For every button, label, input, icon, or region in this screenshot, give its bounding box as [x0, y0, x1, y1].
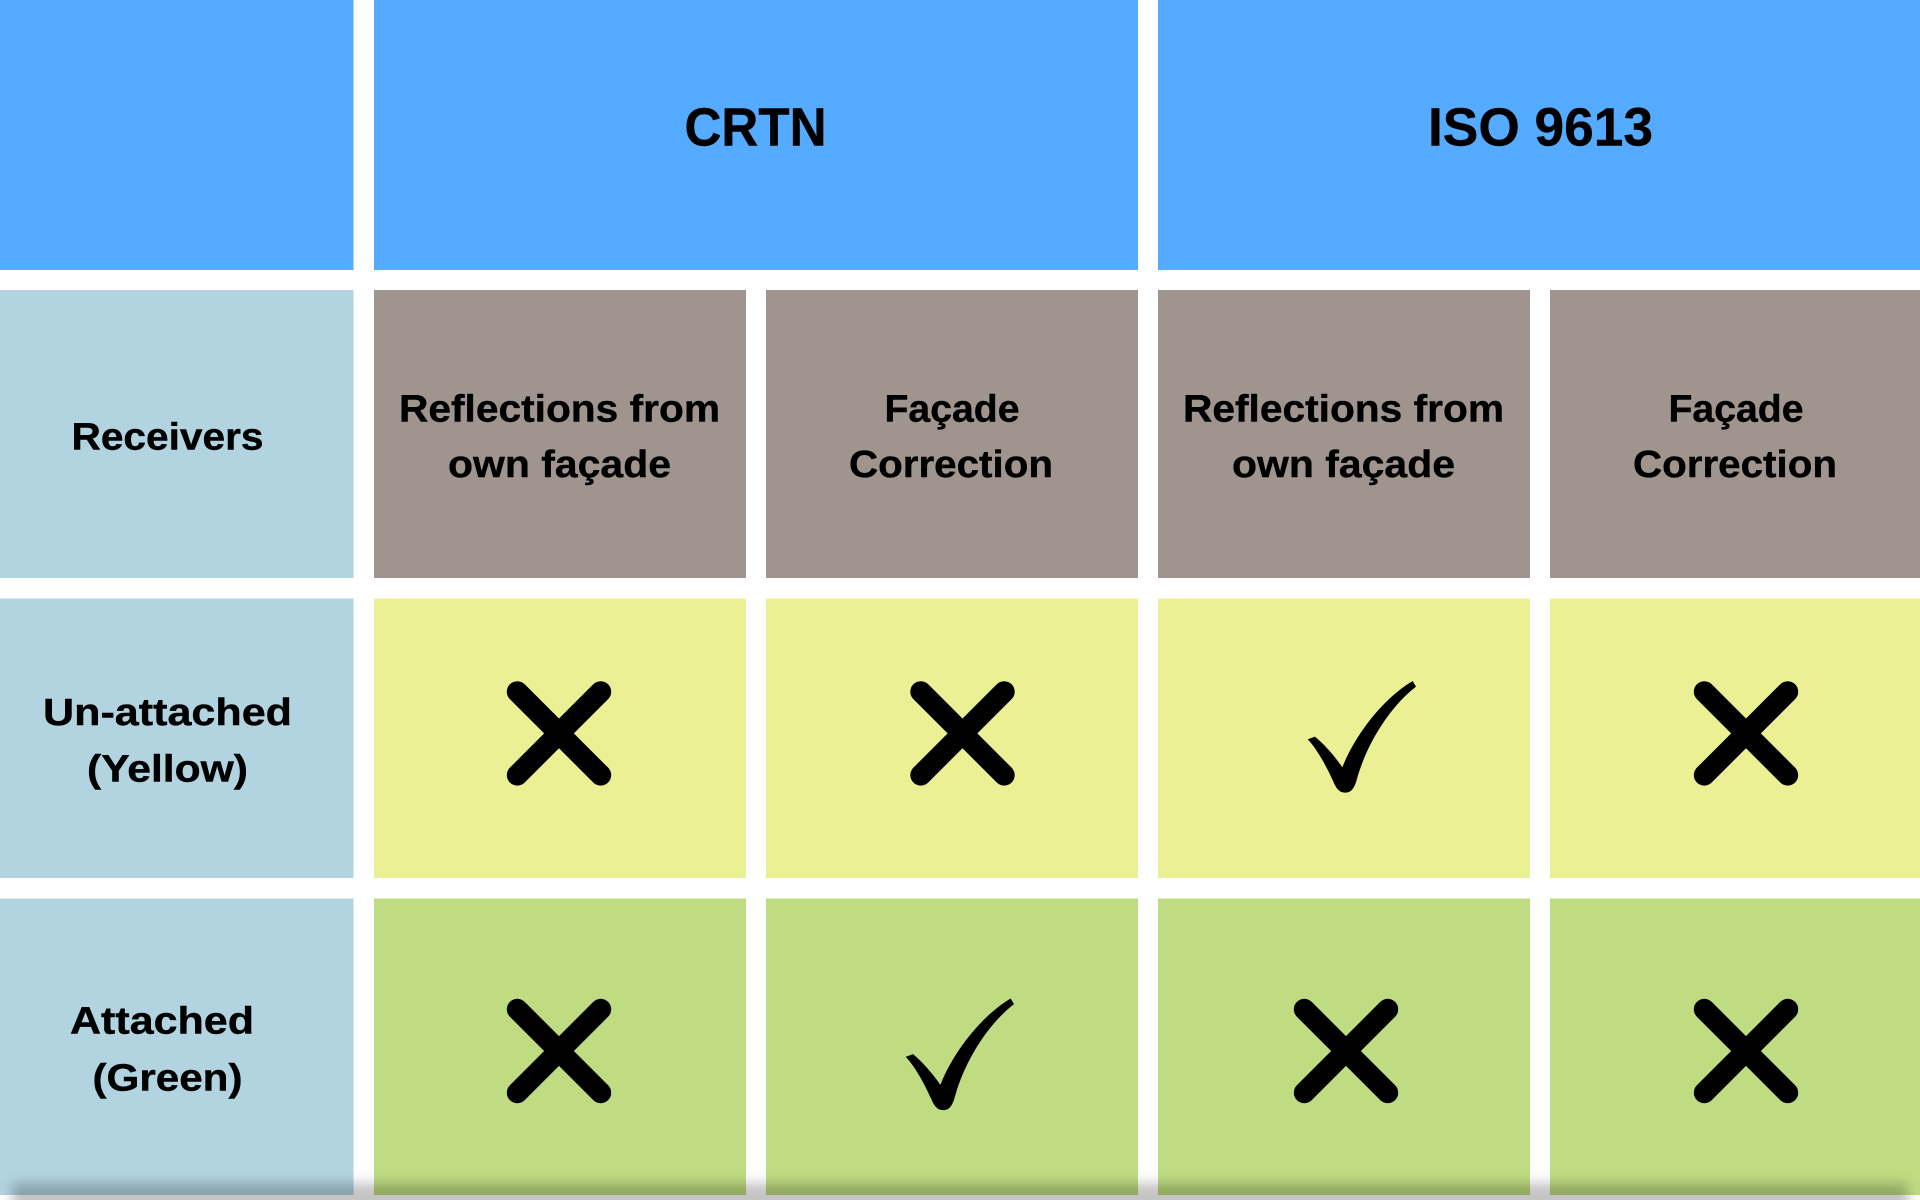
subheader: CRTN façade correction: Correction — [849, 444, 1053, 486]
subheader: ISO reflections from own façade: Reflections from — [1183, 388, 1504, 430]
cell: un-attached, ISO correction, cross — [1550, 598, 1920, 878]
header: CRTN: CRTN — [684, 98, 826, 158]
subheader: ISO façade correction: Correction — [1633, 444, 1837, 486]
cell: un-attached, CRTN reflections, cross — [374, 598, 746, 878]
bottom edge shadow — [12, 1183, 1908, 1200]
subheader: CRTN reflections from own façade — [374, 290, 746, 578]
cell: attached, ISO reflections, cross — [1158, 898, 1530, 1195]
row label: Receivers — [0, 290, 354, 578]
cell: attached, CRTN correction, check — [766, 898, 1138, 1195]
row label: Un-attached (Yellow) — [0, 598, 354, 878]
subheader: ISO façade correction — [1550, 290, 1920, 578]
header: empty corner cell — [0, 0, 354, 270]
subheader: CRTN reflections from own façade: Reflections from — [399, 388, 720, 430]
subheader: ISO reflections from own façade: own façade — [1232, 444, 1455, 486]
subheader: ISO façade correction: Façade — [1668, 388, 1804, 430]
cell: attached, CRTN reflections, cross — [374, 898, 746, 1195]
subheader: CRTN façade correction — [766, 290, 1138, 578]
subheader: CRTN reflections from own façade: own façade — [448, 444, 671, 486]
header: CRTN — [374, 0, 1138, 270]
row label: Un-attached (Yellow): (Yellow) — [87, 748, 248, 790]
cell: un-attached, CRTN correction, cross — [766, 598, 1138, 878]
header: ISO 9613 — [1158, 0, 1920, 270]
header: ISO 9613: ISO 9613 — [1428, 98, 1653, 158]
row label: Un-attached (Yellow): Un-attached — [43, 692, 292, 734]
row label: Attached (Green) — [0, 898, 354, 1195]
row label: Attached (Green): (Green) — [92, 1058, 242, 1100]
subheader: ISO reflections from own façade — [1158, 290, 1530, 578]
cell: un-attached, ISO reflections, check — [1158, 598, 1530, 878]
row label: Attached (Green): Attached — [70, 1000, 254, 1042]
cell: attached, ISO correction, cross — [1550, 898, 1920, 1195]
row label: Receivers: Receivers — [72, 416, 264, 458]
subheader: CRTN façade correction: Façade — [884, 388, 1020, 430]
